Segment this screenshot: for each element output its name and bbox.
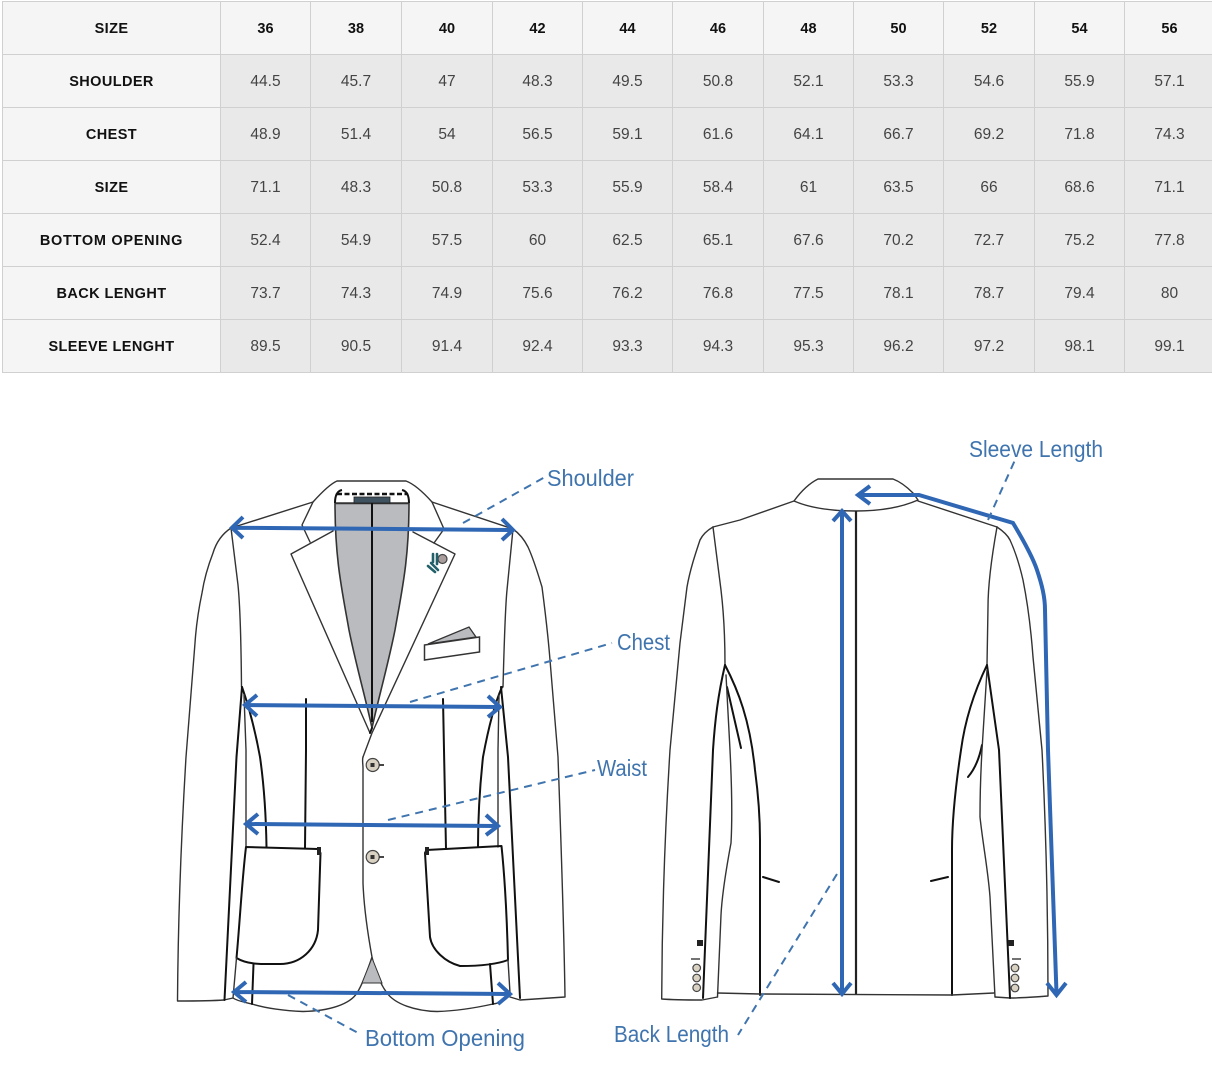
size chart table: 69.2 bbox=[974, 126, 1004, 142]
size chart table: 53.3 bbox=[522, 178, 553, 196]
size chart table: 50.8 bbox=[703, 72, 733, 90]
size chart table: 75.6 bbox=[522, 284, 553, 302]
size chart table: 60 bbox=[529, 232, 546, 248]
size chart table: 36 bbox=[257, 20, 274, 36]
size chart table: 73.7 bbox=[250, 284, 281, 302]
size chart table: 40 bbox=[439, 20, 455, 36]
size chart table: 77.5 bbox=[793, 284, 824, 302]
size chart table: 55.9 bbox=[612, 178, 643, 196]
label: shoulder: Shoulder bbox=[547, 465, 634, 491]
pocket tabs bbox=[317, 847, 429, 855]
front jacket illustration bbox=[178, 481, 565, 1012]
arrow: shoulder bbox=[232, 517, 513, 540]
size chart table: 78.1 bbox=[883, 284, 914, 302]
size chart table: 66 bbox=[980, 178, 998, 196]
size chart table: 58.4 bbox=[703, 178, 733, 196]
front center line bbox=[371, 503, 373, 722]
size chart table: 66.7 bbox=[883, 126, 914, 142]
front darts bbox=[305, 699, 446, 849]
size chart table: 90.5 bbox=[341, 338, 371, 354]
size chart table: 50.8 bbox=[432, 178, 462, 196]
back collar bbox=[794, 479, 918, 511]
size chart table: 96.2 bbox=[883, 338, 914, 354]
front collar bbox=[302, 481, 444, 543]
size chart table: 71.1 bbox=[250, 178, 281, 196]
right lapel bbox=[363, 532, 455, 757]
back right cuff buttons bbox=[1008, 940, 1021, 992]
label: chest: Chest bbox=[617, 629, 671, 655]
size chart table: 48.3 bbox=[341, 178, 371, 196]
back left sleeve bbox=[662, 527, 718, 1000]
size chart table: 76.8 bbox=[703, 284, 733, 302]
leader: bottom opening bbox=[288, 995, 360, 1034]
front button lower bbox=[366, 850, 384, 864]
arrow: waist bbox=[246, 814, 498, 835]
size chart table: 74.3 bbox=[1154, 126, 1185, 142]
size chart table: 97.2 bbox=[974, 338, 1004, 354]
back right side seams bbox=[952, 665, 1010, 998]
left side seams bbox=[224, 687, 266, 1000]
arrow: chest bbox=[245, 695, 500, 717]
size chart table: 71.8 bbox=[1064, 126, 1095, 142]
size chart table: 48 bbox=[800, 20, 817, 36]
leader: sleeve length bbox=[988, 460, 1015, 520]
label: bottom opening: Bottom Opening bbox=[365, 1025, 525, 1051]
size chart table: 95.3 bbox=[793, 338, 824, 354]
size chart table: 47 bbox=[438, 72, 456, 90]
size chart table: 50 bbox=[890, 20, 907, 36]
size chart table: 52.1 bbox=[793, 72, 824, 90]
size chart table: 62.5 bbox=[612, 232, 643, 248]
left sleeve bbox=[178, 528, 233, 1001]
size chart table: 44 bbox=[619, 20, 636, 36]
size chart table: 92.4 bbox=[522, 338, 553, 354]
size chart table: 44.5 bbox=[250, 72, 281, 90]
label: sleeve length: Sleeve Length bbox=[969, 436, 1103, 462]
size chart table: 54.9 bbox=[341, 232, 371, 248]
size chart table: 98.1 bbox=[1064, 338, 1095, 354]
size chart table: 76.2 bbox=[612, 284, 643, 302]
size chart table: 77.8 bbox=[1154, 232, 1185, 248]
size chart table: 91.4 bbox=[432, 338, 462, 354]
right pocket bbox=[425, 846, 508, 966]
size chart table: SIZE bbox=[95, 20, 128, 36]
size chart table: 71.1 bbox=[1154, 178, 1185, 196]
size chart table: SHOULDER bbox=[69, 74, 154, 90]
back armholes bbox=[713, 527, 997, 665]
size chart table: SLEEVE LENGHT bbox=[48, 338, 175, 354]
size chart table: 42 bbox=[529, 20, 546, 36]
arrow: sleeve length bbox=[858, 486, 1066, 995]
size chart table: BOTTOM OPENING bbox=[40, 232, 183, 248]
size chart table: BACK LENGHT bbox=[57, 286, 166, 302]
pocket square bbox=[424, 627, 480, 660]
back hem bbox=[718, 993, 994, 995]
size chart table: 49.5 bbox=[612, 72, 643, 90]
right sleeve bbox=[510, 529, 565, 1000]
back jacket illustration bbox=[662, 479, 1048, 1000]
size chart table: 54.6 bbox=[974, 72, 1004, 90]
leader: shoulder bbox=[463, 477, 545, 523]
size chart table: 65.1 bbox=[703, 232, 733, 248]
size chart table: 79.4 bbox=[1064, 284, 1095, 302]
jacket hem bbox=[233, 757, 510, 1012]
armholes bbox=[231, 528, 513, 687]
size chart table: 54 bbox=[1071, 20, 1088, 36]
size chart table: 75.2 bbox=[1064, 232, 1095, 248]
arrow: bottom opening bbox=[234, 982, 510, 1004]
size chart table: 74.9 bbox=[432, 284, 462, 302]
right side seams bbox=[478, 687, 520, 998]
size chart table: 63.5 bbox=[883, 178, 914, 196]
neck stitching bbox=[335, 490, 409, 504]
size chart table: 38 bbox=[348, 20, 364, 36]
size chart table: 64.1 bbox=[793, 126, 824, 142]
size chart table: 74.3 bbox=[341, 284, 371, 302]
size chart table: 61.6 bbox=[703, 126, 733, 142]
size chart table: 45.7 bbox=[341, 72, 371, 90]
front button upper bbox=[366, 758, 384, 772]
size chart table: 99.1 bbox=[1154, 338, 1185, 354]
size chart table: 80 bbox=[1161, 284, 1178, 302]
size chart table: 55.9 bbox=[1064, 72, 1095, 90]
size chart table: 61 bbox=[800, 178, 817, 196]
size chart table: 48.3 bbox=[522, 72, 553, 90]
back left cuff buttons bbox=[691, 940, 703, 992]
left pocket bbox=[236, 847, 320, 964]
size chart table: 48.9 bbox=[250, 126, 281, 142]
back center seam bbox=[855, 511, 857, 995]
size chart table: 56 bbox=[1161, 20, 1178, 36]
size chart table: 59.1 bbox=[612, 126, 643, 142]
arrow: back length bbox=[833, 511, 851, 994]
size chart table: 56.5 bbox=[522, 126, 553, 142]
size chart table: 53.3 bbox=[883, 72, 914, 90]
size chart table: SIZE bbox=[95, 180, 128, 196]
size chart table: 57.1 bbox=[1154, 72, 1185, 90]
back right sleeve bbox=[995, 527, 1048, 998]
back shoulders bbox=[713, 501, 997, 527]
size chart table: 46 bbox=[710, 20, 726, 36]
size chart table: 93.3 bbox=[612, 338, 643, 354]
size chart table: 51.4 bbox=[341, 126, 371, 142]
leader: chest bbox=[410, 643, 612, 702]
lapel pin bbox=[428, 554, 447, 572]
back vents bbox=[763, 877, 948, 882]
back left side seams bbox=[703, 665, 760, 998]
size chart table: 68.6 bbox=[1064, 178, 1095, 196]
size chart table bbox=[2, 1, 1212, 373]
size chart table: 54 bbox=[438, 126, 456, 142]
leader: waist bbox=[388, 770, 595, 820]
leader: back length bbox=[738, 874, 837, 1035]
size chart table: 89.5 bbox=[250, 338, 281, 354]
size chart table: 94.3 bbox=[703, 338, 733, 354]
label: waist: Waist bbox=[597, 755, 648, 781]
front grey lining bbox=[335, 503, 409, 728]
size chart table: 57.5 bbox=[432, 232, 462, 248]
size chart table: 78.7 bbox=[974, 284, 1004, 302]
size chart table: 70.2 bbox=[883, 232, 914, 248]
size chart table: 52.4 bbox=[250, 232, 281, 248]
size chart table: CHEST bbox=[86, 126, 137, 142]
label: back length: Back Length bbox=[614, 1021, 729, 1047]
size chart table: 72.7 bbox=[974, 232, 1004, 248]
size chart table: 52 bbox=[981, 20, 997, 36]
left lapel bbox=[291, 531, 370, 733]
size chart table: 67.6 bbox=[793, 232, 824, 248]
